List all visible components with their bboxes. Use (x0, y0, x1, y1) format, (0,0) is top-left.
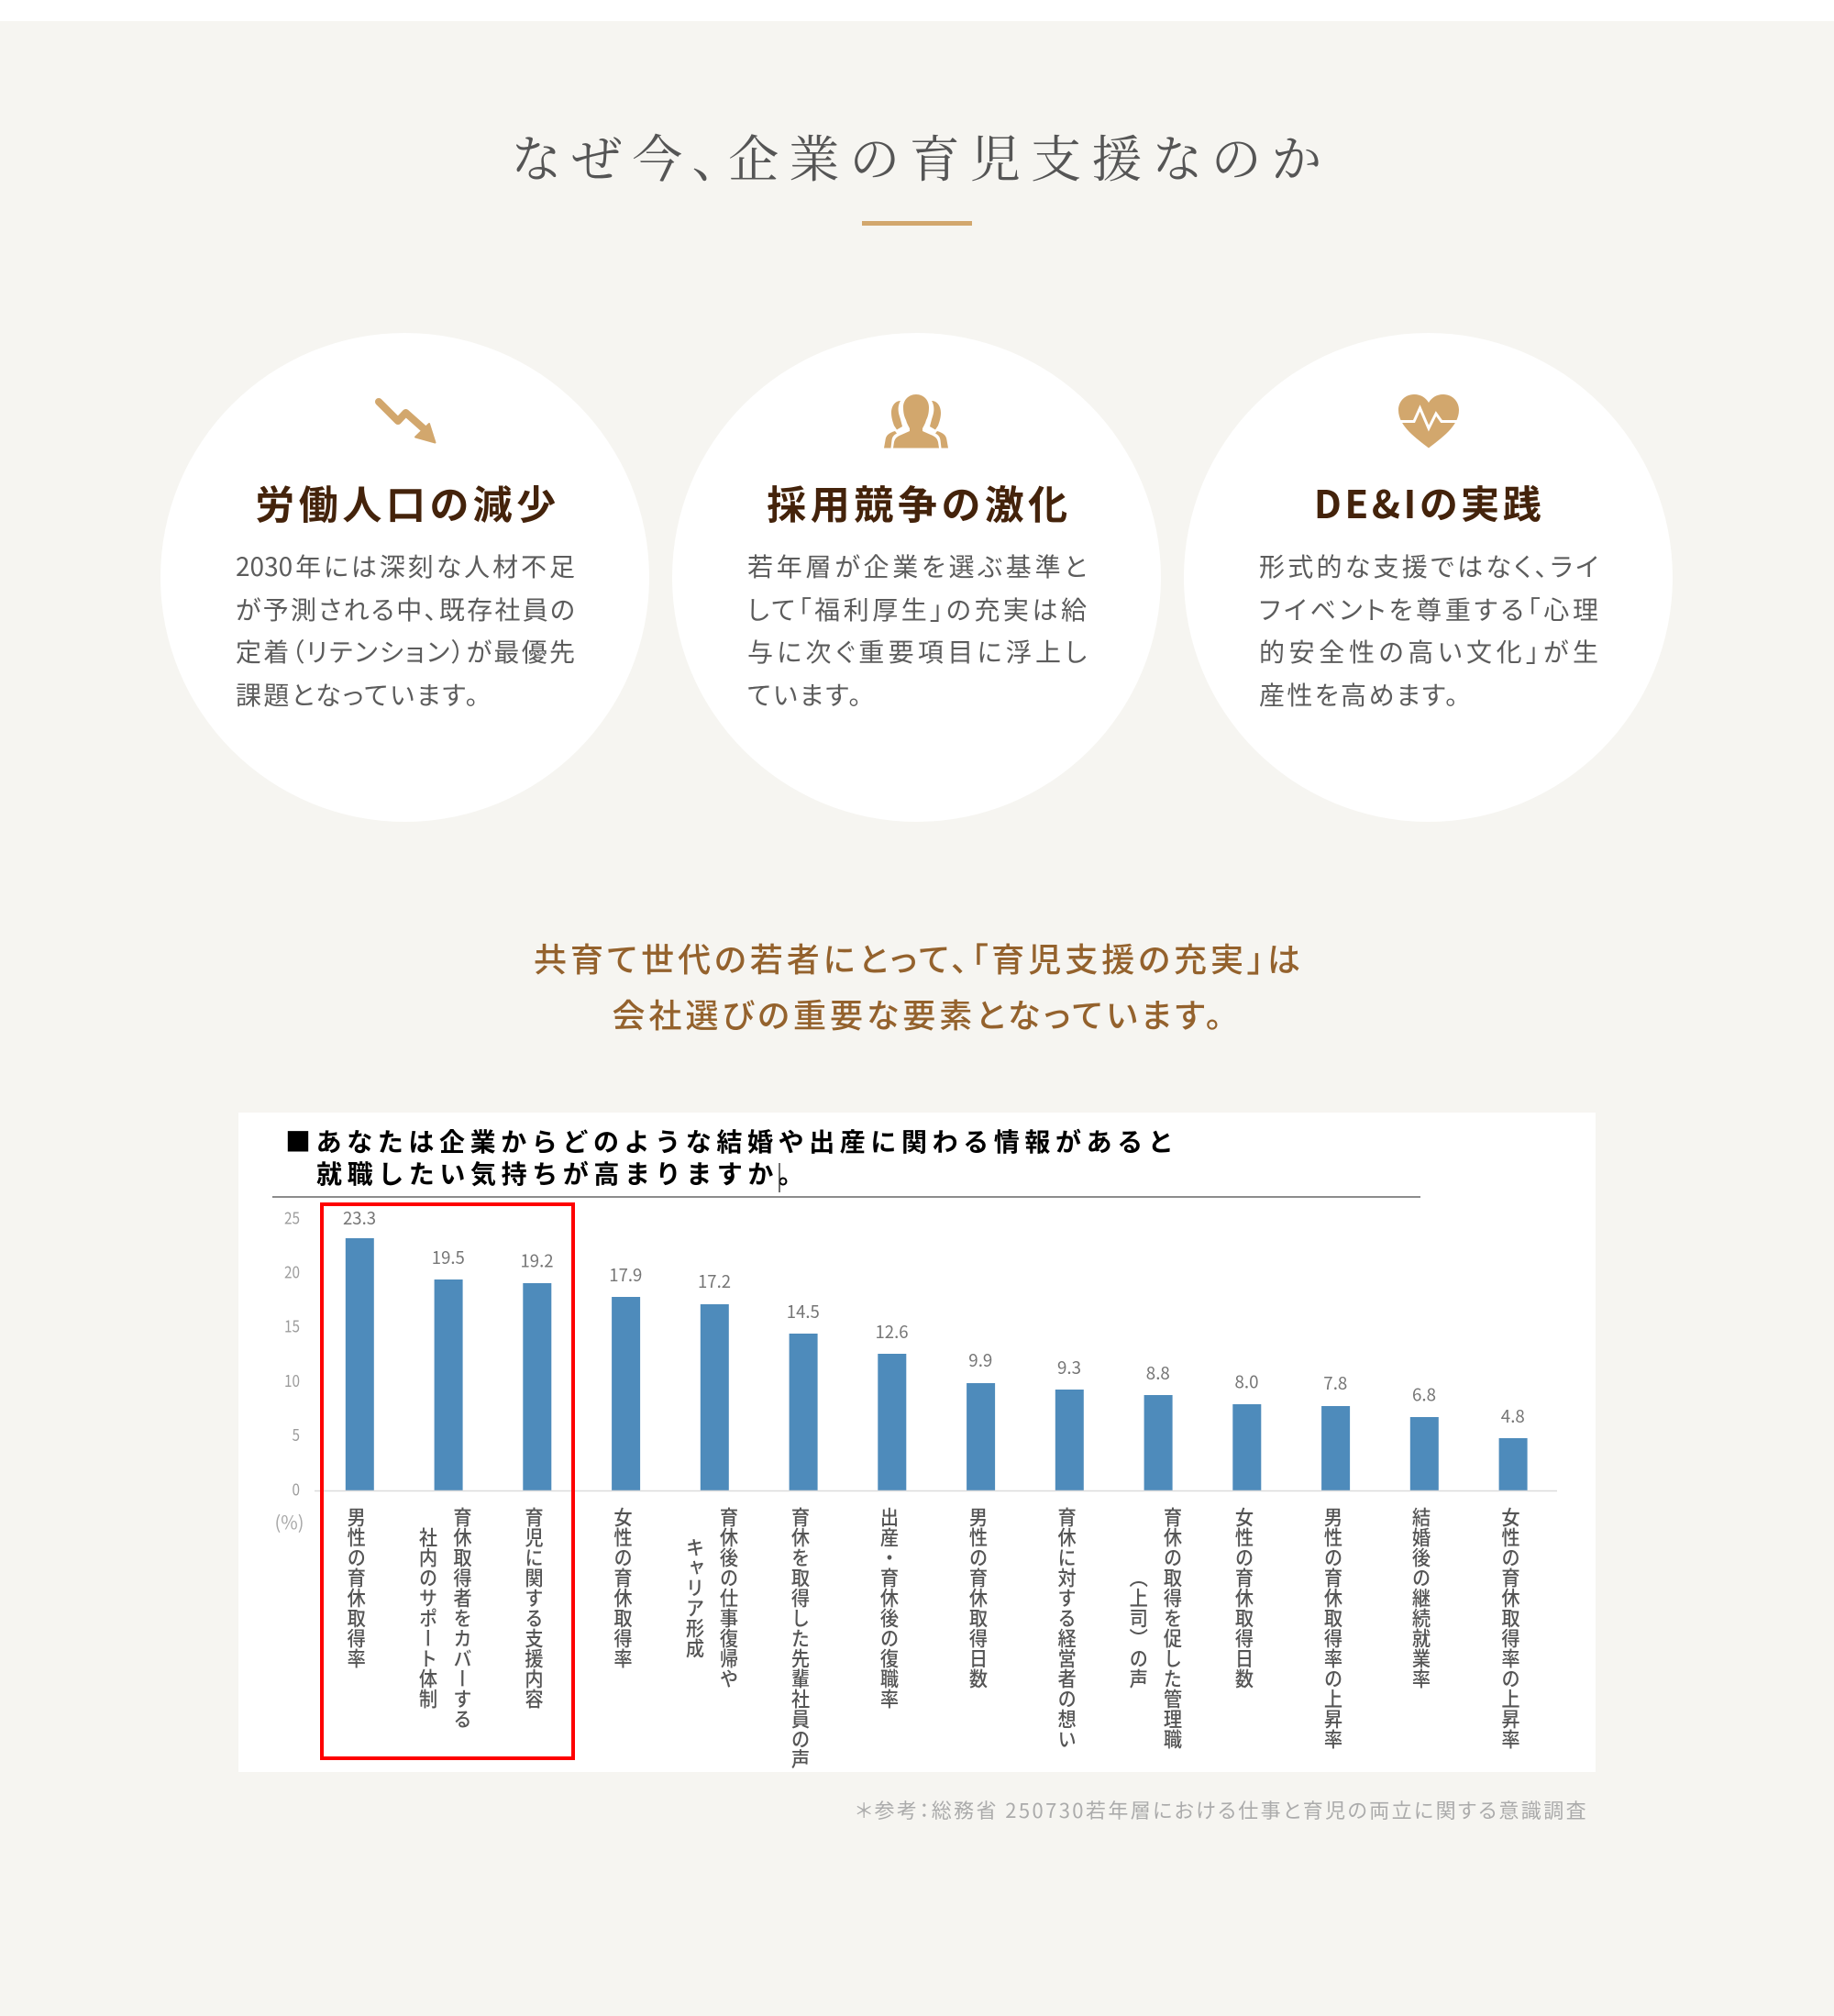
body text: して「福利厚生」の充実は給 (747, 591, 1087, 627)
y axis labels: 5 (292, 1423, 300, 1446)
category labels: 育休取得者をカバーする (449, 1507, 476, 1729)
chart question line 2: 就職したい気持ちが高まりますか。 (316, 1155, 809, 1191)
value labels: 9.9 (968, 1347, 992, 1372)
body text: 定着（リテンション）が最優先 (236, 633, 575, 670)
category labels: キャリア形成 (681, 1537, 709, 1658)
y axis labels: 20 (284, 1260, 300, 1284)
category labels: 男性の育休取得日数 (965, 1507, 992, 1689)
icon: falling arrow (375, 398, 436, 444)
value labels: 9.3 (1057, 1355, 1081, 1379)
value labels: 17.9 (609, 1262, 642, 1287)
source footnote: ＊参考：総務省 250730若年層における仕事と育児の両立に関する意識調査 (856, 1795, 1588, 1824)
body text (747, 548, 1087, 713)
icon: heart with pulse (1398, 394, 1459, 448)
value labels: 12.6 (875, 1319, 908, 1344)
category labels: 育休の取得を促した管理職 (1159, 1507, 1187, 1749)
red highlight box (322, 1204, 573, 1758)
body text (1259, 548, 1598, 713)
value labels: 19.2 (521, 1247, 554, 1273)
y axis labels: 0 (292, 1477, 300, 1501)
category labels: 育休に対する経営者の想い (1054, 1507, 1080, 1749)
y axis labels: 25 (284, 1205, 300, 1229)
body text (236, 548, 575, 713)
value labels: 19.5 (432, 1245, 465, 1269)
y axis labels: (%) (275, 1508, 304, 1534)
category labels: 育児に関する支援内容 (521, 1507, 547, 1709)
title: なぜ今、企業の育児支援なのか (511, 119, 1331, 192)
category labels: 男性の育休取得率の上昇率 (1320, 1507, 1347, 1749)
subheading line 2: 会社選びの重要な要素となっています。 (613, 990, 1225, 1037)
category labels (343, 1507, 1524, 1769)
body text: 若年層が企業を選ぶ基準と (747, 548, 1087, 584)
value labels: 6.8 (1412, 1381, 1436, 1407)
value labels: 14.5 (787, 1299, 820, 1324)
value labels: 8.0 (1234, 1368, 1258, 1394)
category labels: 男性の育休取得率 (343, 1507, 370, 1668)
value labels: 23.3 (343, 1205, 376, 1230)
value labels: 7.8 (1323, 1370, 1347, 1395)
category labels: 社内のサポート体制 (414, 1527, 442, 1709)
body text: 2030年には深刻な人材不足 (236, 548, 575, 584)
subheading line 1: 共育て世代の若者にとって、「育児支援の充実」は (534, 934, 1304, 981)
y axis labels: 10 (284, 1368, 300, 1392)
panel: DE&I practice (1184, 333, 1673, 822)
value labels: 4.8 (1501, 1403, 1525, 1428)
category labels: 女性の育休取得日数 (1231, 1507, 1258, 1689)
category labels: 結婚後の継続就業率 (1408, 1507, 1435, 1689)
body text: 形式的な支援ではなく、ライ (1259, 548, 1598, 584)
body text: フイベントを尊重する「心理 (1259, 591, 1598, 627)
y axis labels (275, 1205, 304, 1534)
value labels (343, 1205, 1525, 1428)
value labels: 8.8 (1146, 1360, 1170, 1385)
body text: が予測される中、既存社員の (236, 591, 575, 627)
heading: 採用競争の激化 (767, 474, 1072, 531)
bars (346, 1238, 1528, 1490)
icon: people group (884, 394, 948, 448)
category labels: 女性の育休取得率の上昇率 (1497, 1507, 1524, 1749)
category labels: 出産・育休後の復職率 (876, 1507, 903, 1709)
body text: 的安全性の高い文化」が生 (1259, 633, 1598, 670)
chart question line 1: ■あなたは企業からどのような結婚や出産に関わる情報があると (285, 1123, 1178, 1159)
body text: ています。 (747, 676, 864, 713)
heading: 労働人口の減少 (255, 474, 560, 531)
category labels: 育休後の仕事復帰や (715, 1507, 743, 1689)
panel: hiring competition (672, 333, 1161, 822)
heading: DE&Iの実践 (1314, 474, 1544, 530)
y axis labels: 15 (284, 1313, 300, 1337)
value labels: 17.2 (698, 1268, 731, 1293)
category labels: 女性の育休取得率 (610, 1507, 636, 1668)
category labels: （上司）の声 (1125, 1567, 1153, 1689)
panel: labour population decline (160, 333, 649, 822)
bar chart (272, 1163, 1557, 1769)
category labels: 育休を取得した先輩社員の声 (787, 1507, 814, 1769)
panel: bar chart (238, 1113, 1596, 1772)
body text: 与に次ぐ重要項目に浮上し (747, 633, 1087, 670)
body text: 産性を高めます。 (1259, 676, 1460, 713)
body text: 課題となっています。 (236, 676, 481, 713)
title underline (862, 221, 972, 226)
